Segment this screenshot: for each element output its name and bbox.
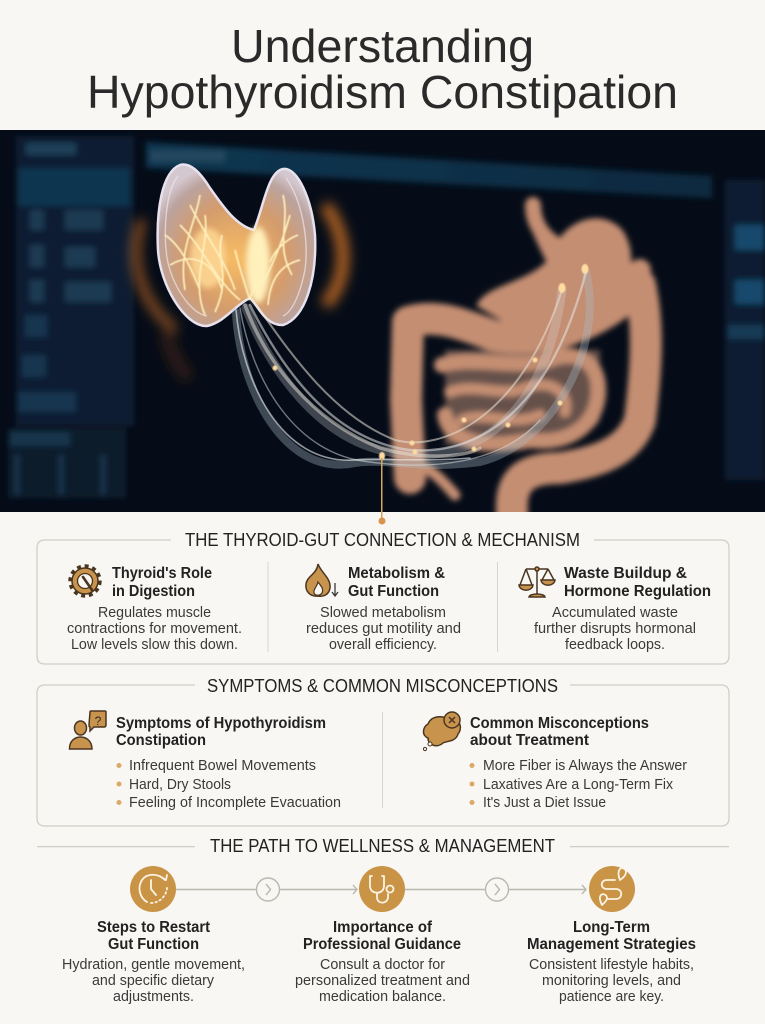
item: misconceptions list: about Treatment xyxy=(470,732,590,749)
heading: connection: THE THYROID-GUT CONNECTION & MECHANISM xyxy=(185,529,580,550)
icon: thought cloud with x xyxy=(423,712,460,751)
icon: flame with down arrow xyxy=(306,564,338,596)
divider center xyxy=(382,712,383,808)
glowing fiber points xyxy=(272,264,588,460)
step 3: patience are key. xyxy=(559,989,664,1005)
item: waste buildup: Accumulated waste xyxy=(552,605,678,621)
step 3: Long-Term xyxy=(573,919,650,936)
step 3: monitoring levels, and xyxy=(542,973,681,989)
item: metabolism: overall efficiency. xyxy=(329,637,437,653)
item: metabolism: Slowed metabolism xyxy=(320,605,446,621)
panel: symptoms and misconceptions xyxy=(37,675,729,826)
step 2: personalized treatment and xyxy=(295,973,470,989)
item: thyroid's role: in Digestion xyxy=(112,583,195,600)
icon: balance scales xyxy=(519,567,555,597)
title: Hypothyroidism Constipation xyxy=(87,66,678,118)
step 1: and specific dietary xyxy=(92,973,215,989)
section: path to wellness xyxy=(37,835,729,1005)
title: Understanding xyxy=(231,20,534,72)
item: thyroid's role: contractions for movement. xyxy=(67,621,242,637)
panel: thyroid-gut connection xyxy=(37,529,729,664)
item: metabolism: Gut Function xyxy=(348,583,439,600)
step 3: Consistent lifestyle habits, xyxy=(529,957,694,973)
step 3 xyxy=(527,866,696,1005)
blurred dashboard screen xyxy=(8,136,765,498)
item: symptoms list xyxy=(69,711,341,811)
item: thyroid's role: Thyroid's Role xyxy=(112,565,212,582)
icon: stethoscope xyxy=(359,866,405,912)
step 1: Hydration, gentle movement, xyxy=(62,957,245,973)
item: waste buildup: Hormone Regulation xyxy=(564,583,711,600)
item: metabolism: reduces gut motility and xyxy=(306,621,461,637)
divider right xyxy=(497,562,498,652)
item: waste buildup: Waste Buildup & xyxy=(564,565,687,582)
step 1 xyxy=(62,866,245,1005)
divider left xyxy=(268,562,269,652)
item: waste buildup xyxy=(519,565,711,653)
item: misconceptions list: Common Misconceptions xyxy=(470,715,649,732)
step 2: Importance of xyxy=(333,919,433,936)
step 2: Consult a doctor for xyxy=(320,957,445,973)
icon: winding route with pins xyxy=(589,866,635,912)
item: symptoms list: Constipation xyxy=(116,732,206,749)
heading: symptoms: SYMPTOMS & COMMON MISCONCEPTIONS xyxy=(207,675,558,696)
item: thyroid's role: Low levels slow this down. xyxy=(71,637,238,653)
item: waste buildup: feedback loops. xyxy=(565,637,665,653)
step 2 xyxy=(295,866,470,1005)
item: thyroid's role: Regulates muscle xyxy=(98,605,211,621)
step 3: Management Strategies xyxy=(527,936,696,953)
step 1: Gut Function xyxy=(108,936,199,953)
icon: clock xyxy=(130,866,176,912)
step 2: medication balance. xyxy=(319,989,446,1005)
item: metabolism xyxy=(306,564,461,653)
title xyxy=(87,20,678,118)
icon: gear with wrench xyxy=(70,566,100,596)
item: symptoms list: Symptoms of Hypothyroidism xyxy=(116,715,326,732)
item: symptoms list: Feeling of Incomplete Evacuation xyxy=(129,795,341,811)
item: metabolism: Metabolism & xyxy=(348,565,445,582)
step 1: Steps to Restart xyxy=(97,919,211,936)
item: misconceptions list: Laxatives Are a Long-Term Fix xyxy=(483,777,674,793)
connector line from illustration to first section xyxy=(378,458,386,524)
item: waste buildup: further disrupts hormonal xyxy=(534,621,696,637)
item: misconceptions list: It's Just a Diet Issue xyxy=(483,795,606,811)
step 2: Professional Guidance xyxy=(303,936,461,953)
thyroid gland xyxy=(158,164,315,326)
item: misconceptions list: More Fiber is Always the Answer xyxy=(483,758,687,774)
hero illustration: thyroid connected to the gut xyxy=(0,130,765,512)
item: symptoms list: Hard, Dry Stools xyxy=(129,777,231,793)
flow arrows xyxy=(176,878,586,901)
icon: person with question bubble: ? xyxy=(95,714,102,728)
item: misconceptions list xyxy=(423,712,687,811)
blurred gut xyxy=(406,205,646,512)
nerve fibers xyxy=(236,272,590,465)
thyroid glow xyxy=(136,205,343,378)
heading: wellness: THE PATH TO WELLNESS & MANAGEMENT xyxy=(210,835,555,856)
item: thyroid's role xyxy=(67,565,242,653)
item: symptoms list: Infrequent Bowel Movements xyxy=(129,758,316,774)
icon: person with question bubble xyxy=(69,711,106,749)
step 1: adjustments. xyxy=(113,989,194,1005)
